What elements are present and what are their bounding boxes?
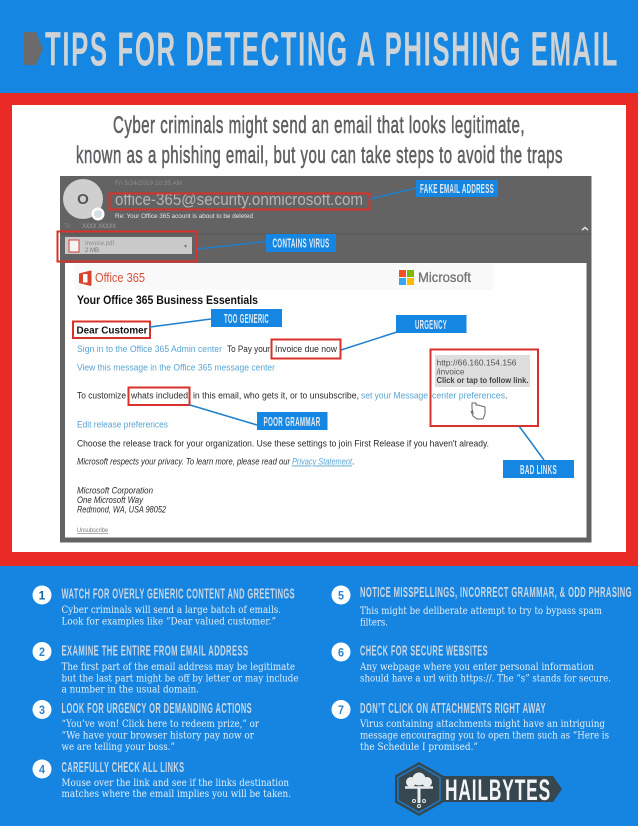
tip 2: [32, 642, 298, 696]
tip 3: LOOK FOR URGENCY OR DEMANDING ACTIONS: [62, 700, 252, 717]
tip 1: Cyber criminals will send a large batch of emails.: [62, 604, 281, 616]
tip 6: CHECK FOR SECURE WEBSITES: [360, 642, 488, 660]
office wordmark: Office 365: [95, 270, 145, 285]
tip 3: “We have your browser history pay now or: [62, 730, 255, 742]
email text: View this message in the Office 365 message center: [77, 362, 275, 372]
tip 7: 7: [338, 703, 344, 717]
logo hexagon: [395, 762, 443, 816]
email text: One Microsoft Way: [77, 495, 143, 505]
tips panel: WATCH FOR OVERLY GENERIC CONTENT AND GREETINGS: [62, 586, 295, 602]
subtitle: [76, 112, 563, 169]
email sender avatar: [63, 179, 104, 220]
email metadata: office-365@security.onmicrosoft.com: [115, 190, 363, 209]
tip 2: EXAMINE THE ENTIRE FROM EMAIL ADDRESS: [62, 642, 248, 660]
tip 4: Mouse over the link and see if the links destination: [62, 777, 289, 789]
tip 4: 4: [39, 762, 45, 776]
email text: Redmond, WA, USA 98052: [77, 504, 166, 514]
tip 3: 3: [39, 703, 45, 717]
tip 4: CAREFULLY CHECK ALL LINKS: [62, 759, 184, 776]
email text: set your Message: [361, 390, 428, 400]
callout: poor grammar: POOR GRAMMAR: [264, 414, 321, 429]
callout: urgency: URGENCY: [415, 317, 447, 332]
callout: too generic: TOO GENERIC: [224, 311, 269, 326]
email sender avatar: O: [77, 191, 89, 208]
tip 6: 6: [338, 646, 344, 660]
icon: title arrow: [24, 32, 43, 65]
tip 2: 2: [39, 645, 45, 659]
icon: office logo: [79, 270, 92, 286]
attachment chip: [65, 237, 192, 254]
tip 3: we are telling your boss.”: [62, 741, 175, 753]
email metadata: To:: [64, 224, 72, 230]
tip 5: [332, 584, 632, 628]
attachment chip: ▾: [184, 244, 187, 250]
tip 1: Look for examples like “Dear valued customer.”: [62, 616, 276, 628]
callout: bad links: BAD LINKS: [520, 462, 557, 477]
icon: microsoft logo: [399, 270, 414, 285]
icon: cloud circuit: [405, 773, 433, 808]
tip 5: 5: [338, 588, 344, 602]
link tooltip: [435, 355, 530, 387]
email text: .: [352, 456, 355, 466]
email text: Your Office 365 Business Essentials: [77, 295, 258, 307]
email metadata: Re: Your Office 365 acount is about to be deleted: [115, 213, 253, 220]
callout: urgency: [272, 315, 466, 358]
tip 7: [332, 700, 609, 753]
email text: center preferences: [432, 390, 505, 400]
callout: bad links: [430, 350, 574, 478]
email text: Microsoft Corporation: [77, 486, 153, 496]
callout: fake email address: [110, 180, 498, 210]
tip 6: [332, 642, 611, 684]
tip 3: “You’ve won! Click here to redeem prize,” or: [62, 718, 260, 730]
email text: Choose the release track for your organization. Use these settings to join First Release if you haven't already.: [77, 438, 489, 448]
callout: poor grammar: [128, 388, 328, 430]
callout: contains virus: [58, 232, 336, 262]
email text: Sign in to the Office 365 Admin center: [77, 344, 222, 354]
email text: Edit release preferences: [77, 420, 168, 430]
link tooltip: Click or tap to follow link.: [436, 375, 528, 385]
tip 2: a number in the usual domain.: [62, 684, 199, 696]
microsoft wordmark: Microsoft: [418, 269, 471, 285]
tip 4: [32, 759, 291, 800]
tip 2: but the last part might be off by letter or may include: [62, 672, 298, 684]
attachment chip: Invoice.pdf: [85, 241, 114, 247]
email screenshot: [58, 176, 592, 542]
email metadata: [64, 180, 588, 230]
email metadata: Fri 5/24/2019 10:35 AM: [115, 180, 182, 187]
logo: hailbytes: [395, 762, 562, 816]
callout: fake email address: FAKE EMAIL ADDRESS: [420, 181, 494, 196]
icon: hand cursor: [471, 403, 485, 419]
email text: To Pay your: [227, 344, 270, 354]
email text: Unsubscribe: [77, 528, 109, 534]
link tooltip: http://66.160.154.156: [436, 358, 517, 368]
email text: [76, 295, 508, 534]
link tooltip: /invoice: [436, 366, 465, 376]
tip 1: [32, 586, 295, 628]
email body: [65, 263, 586, 538]
email text: in this email, who gets it, or to unsubscribe,: [193, 390, 359, 400]
tip 5: filters.: [360, 616, 388, 628]
email text: Microsoft respects your privacy. To learn more, please read our: [77, 456, 291, 466]
tip 4: matches where the email implies you will be taken.: [62, 788, 291, 800]
email text: Dear Customer: [76, 326, 148, 336]
logo wordmark: HAILBYTES: [445, 774, 551, 807]
email text: Privacy Statement: [292, 456, 352, 466]
panel: red framed example: [0, 93, 638, 566]
email text: .: [505, 390, 508, 400]
logo banner: [430, 776, 562, 802]
tip 2: The first part of the email address may be legitimate: [62, 661, 295, 673]
email text: To customize: [77, 390, 126, 400]
tip 3: [32, 700, 260, 753]
tip 7: the Schedule I promised.”: [360, 741, 478, 753]
callout: contains virus: CONTAINS VIRUS: [272, 236, 330, 250]
header banner: [0, 0, 638, 93]
email text: whats included: [130, 390, 188, 400]
tip 6: Any webpage where you enter personal information: [359, 661, 594, 673]
tips panel: [32, 584, 632, 800]
email metadata: XXXX XXXXX: [82, 224, 116, 230]
callout: too generic: [73, 309, 282, 338]
email text: Invoice due now: [275, 344, 337, 354]
tip 1: 1: [39, 588, 46, 602]
attachment chip: 2 MB: [85, 248, 99, 254]
